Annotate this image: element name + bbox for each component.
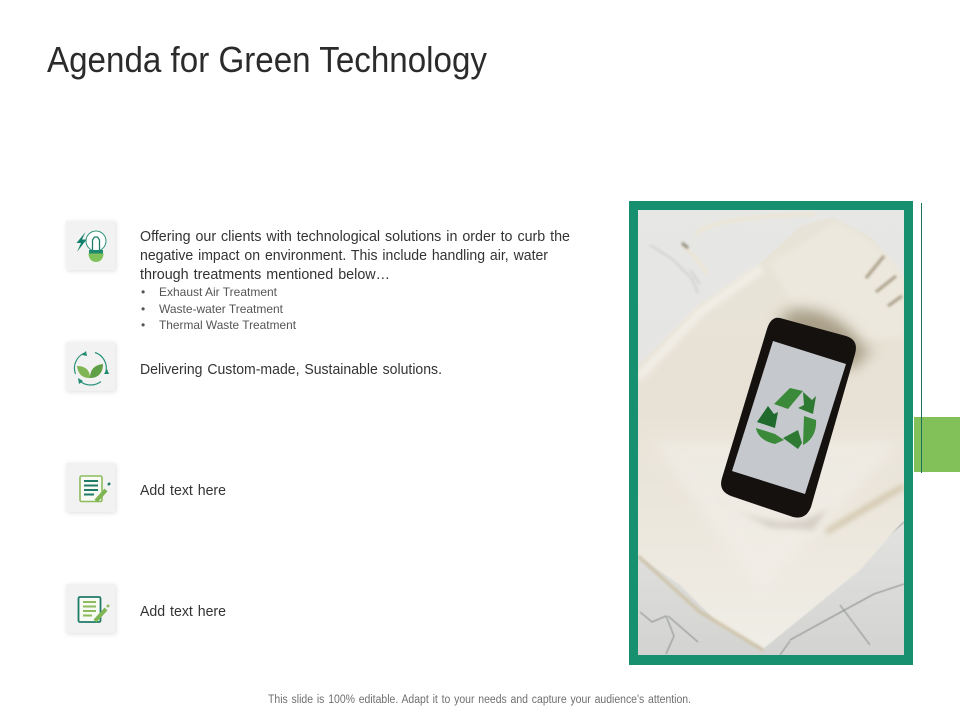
agenda item 1 <box>66 221 570 332</box>
photo frame <box>629 201 913 665</box>
text: intro paragraph: Offering our clients with technological solutions in order to curb the <box>140 229 570 245</box>
phone <box>721 318 856 518</box>
icon: document with pencil, light border <box>66 463 115 512</box>
icon: light bulb with bolt <box>66 221 115 270</box>
icon: leaf with circular arrows <box>66 342 115 391</box>
text: item 3: Add text here <box>140 483 226 499</box>
text: item 4: Add text here <box>140 604 226 620</box>
text: intro paragraph: negative impact on environment. This include handling air, water <box>140 248 548 264</box>
bullet list: Waste-water Treatment <box>159 302 284 316</box>
text: intro paragraph <box>140 229 570 283</box>
icon: recycling arrows <box>756 388 816 449</box>
bullet list: • <box>141 318 145 332</box>
icon: document with pencil, dark border <box>66 584 115 633</box>
agenda item 2 <box>66 342 442 391</box>
agenda item 4 <box>66 584 226 633</box>
title: Agenda for Green Technology <box>47 39 487 80</box>
bullet list: • <box>141 302 145 316</box>
bullet list <box>141 285 297 332</box>
bullet list: Thermal Waste Treatment <box>159 318 297 332</box>
agenda item 3 <box>66 463 226 512</box>
cotton bag <box>638 214 904 650</box>
bullet list: Exhaust Air Treatment <box>159 285 278 299</box>
marble background <box>638 210 904 655</box>
text: item 2: Delivering Custom-made, Sustainable solutions. <box>140 362 442 378</box>
text: intro paragraph: through treatments mentioned below… <box>140 267 390 283</box>
footer note: This slide is 100% editable. Adapt it to your needs and capture your audience's attention. <box>268 694 691 706</box>
photo: phone with recycling symbol on cotton bag <box>638 210 904 655</box>
decorative accent: vertical line and green block <box>914 203 960 473</box>
bullet list: • <box>141 285 145 299</box>
